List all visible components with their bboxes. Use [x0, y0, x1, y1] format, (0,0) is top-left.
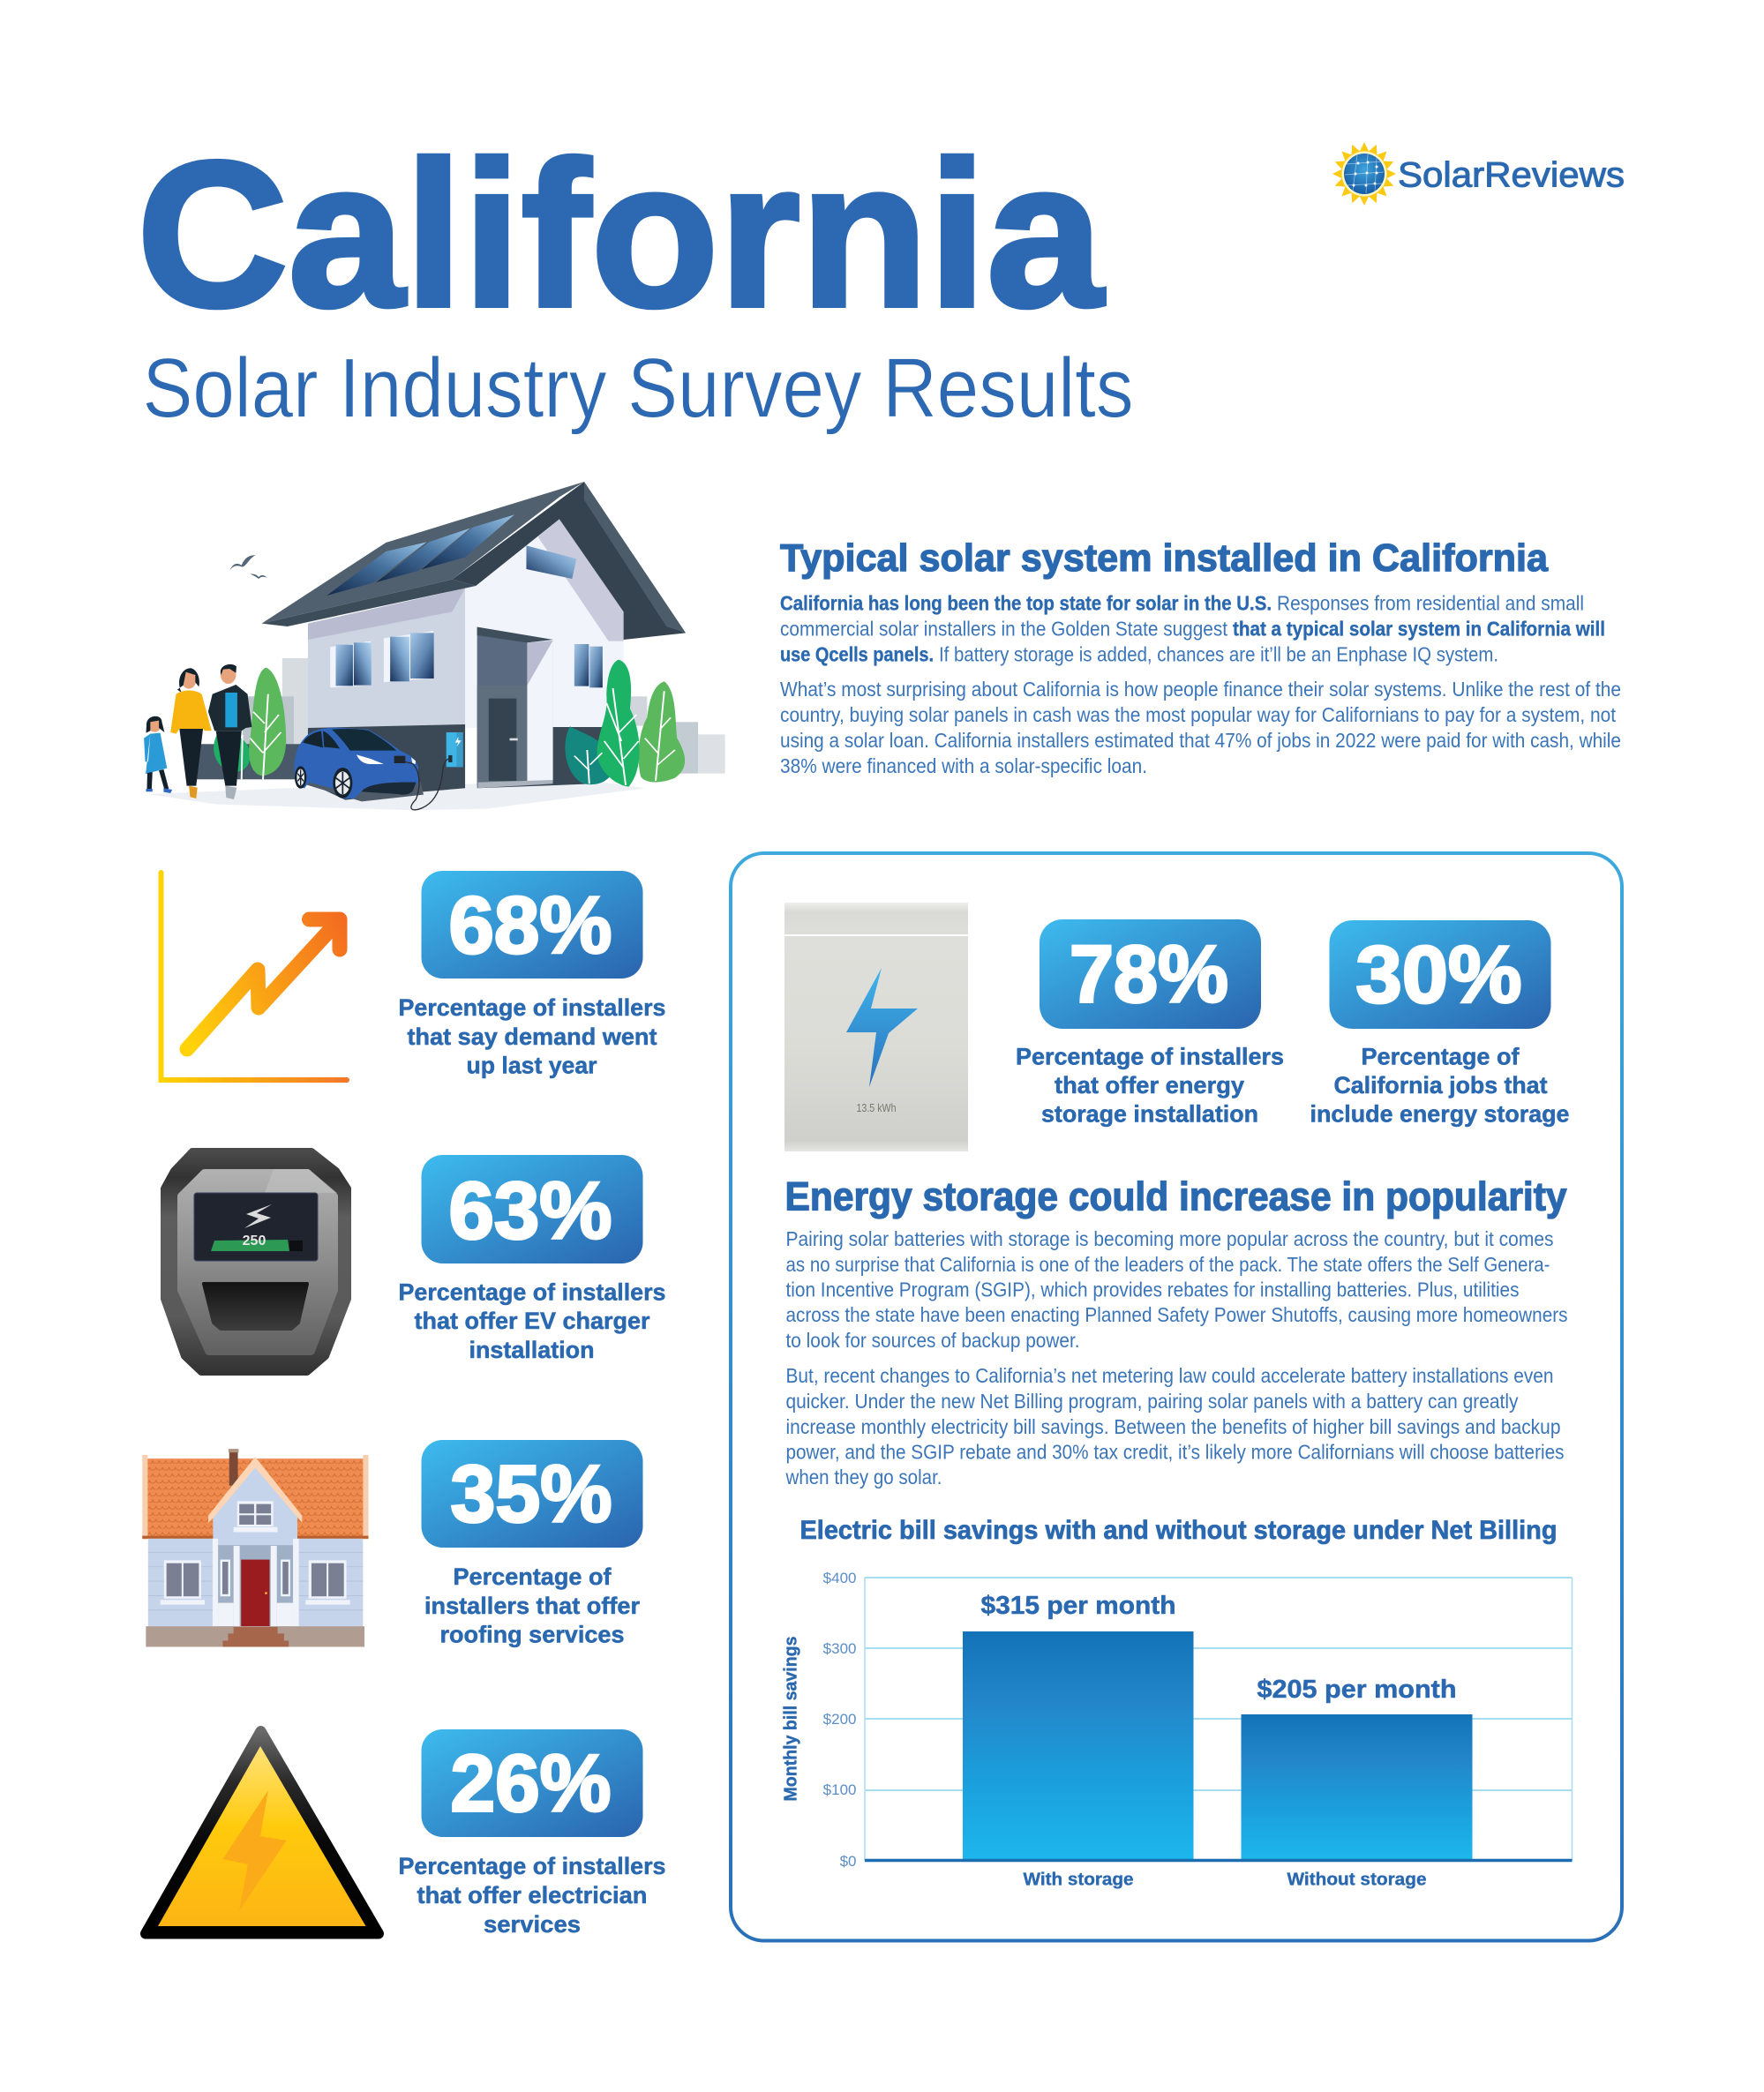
y axis ticks	[823, 1570, 856, 1870]
caption: demand: up last year	[466, 1052, 597, 1078]
caption: demand: Percentage of installers	[399, 994, 665, 1021]
caption: demand	[399, 994, 665, 1078]
pill: 63%	[422, 1155, 642, 1263]
background blocks	[243, 658, 725, 774]
y axis ticks: $0	[840, 1853, 856, 1870]
car charging	[294, 728, 450, 810]
ground shadow	[148, 781, 645, 810]
panel border	[731, 853, 1622, 1941]
illustration: family, house with solar panels and EV	[144, 482, 725, 810]
text block: financing: using a solar loan. California installers estimated that 47% of jobs in 2022 were paid for with cash, while	[780, 729, 1621, 752]
x label: with storage: With storage	[1024, 1871, 1133, 1890]
icon: home battery: 13.5 kWh	[856, 1101, 897, 1114]
text block: storage popularity	[785, 1227, 1567, 1352]
caption: jobs with storage: Percentage of	[1361, 1043, 1520, 1069]
title: California	[137, 118, 1105, 349]
stat: 68% demand	[161, 871, 665, 1080]
text block: California intro: that a typical solar system in California will	[1233, 618, 1605, 641]
text block: financing: 38% were financed with a solar-specific loan.	[780, 754, 1147, 777]
logo: SolarReviews	[1332, 142, 1625, 206]
caption: jobs with storage	[1310, 1043, 1569, 1128]
windows	[330, 545, 603, 687]
text block: financing: What’s most surprising about California is how people finance their solar systems. Unlike the rest of the	[780, 678, 1621, 701]
text block: net billing: power, and the SGIP rebate and 30% tax credit, it’s likely more Californians will choose batteries	[785, 1440, 1564, 1463]
car shadow	[303, 776, 424, 801]
pill: 30%: 30%	[1355, 930, 1521, 1020]
text block: California intro	[780, 591, 1605, 665]
caption: electrician	[399, 1853, 665, 1938]
y axis ticks: $400	[823, 1570, 856, 1586]
caption: energy storage	[1016, 1043, 1284, 1128]
solar panels	[327, 514, 514, 596]
caption: EV charger: Percentage of installers	[399, 1279, 665, 1306]
stat: 26% electrician	[146, 1729, 665, 1938]
caption: energy storage: storage installation	[1041, 1101, 1258, 1128]
pill: 35%	[422, 1440, 642, 1548]
low garden wall	[195, 744, 311, 779]
house and trees	[148, 482, 725, 810]
text block: California intro: Responses from residential and small	[1277, 591, 1584, 614]
caption: energy storage: Percentage of installers	[1016, 1043, 1284, 1069]
porch and door	[477, 627, 553, 788]
text block: California intro: California has long been the top state for solar in the U.S.	[780, 591, 1272, 614]
pill: 78%: 78%	[1070, 930, 1228, 1020]
icon: rising arrow chart	[161, 873, 347, 1080]
woman	[170, 668, 212, 799]
people: family	[144, 664, 251, 799]
x label: without storage: Without storage	[1287, 1871, 1426, 1890]
caption: electrician: Percentage of installers	[399, 1853, 665, 1879]
pill: 68%: 68%	[448, 881, 612, 971]
value label: $205: $205 per month	[1257, 1676, 1456, 1704]
house side wall	[308, 589, 465, 730]
stat: 35% roofing	[142, 1440, 643, 1648]
house base	[308, 724, 465, 800]
windshield	[332, 729, 396, 751]
caption: roofing: installers that offer	[424, 1593, 640, 1619]
pill: 78%	[1040, 919, 1261, 1029]
headlights	[357, 754, 416, 764]
y axis ticks: $300	[823, 1640, 856, 1657]
man	[208, 664, 251, 799]
pill: 63%: 63%	[448, 1166, 612, 1256]
text block: net billing: when they go solar.	[785, 1466, 942, 1488]
text block: storage popularity: tion Incentive Program (SGIP), which provides rebates for installing batteries. Plus, utilities	[785, 1278, 1520, 1301]
house front wall	[465, 519, 624, 728]
icon: home battery	[784, 903, 968, 1151]
heading: typical solar system: Typical solar system installed in California	[780, 536, 1549, 580]
text block: financing: country, buying solar panels in cash was the most popular way for Californians to pay for a system, not	[780, 703, 1617, 726]
charging cable	[402, 759, 450, 810]
caption: EV charger: that offer EV charger	[415, 1308, 650, 1334]
caption: EV charger	[399, 1279, 665, 1363]
value label: $315: $315 per month	[981, 1592, 1175, 1620]
logo wordmark: SolarReviews	[1398, 155, 1625, 194]
y axis ticks: $100	[823, 1781, 856, 1798]
icon: sun with solar globe	[1332, 142, 1396, 206]
pill: 35%: 35%	[450, 1449, 612, 1539]
wheels	[295, 766, 352, 799]
text block: financing	[780, 678, 1621, 777]
caption: electrician: services	[484, 1911, 581, 1938]
people and birds	[144, 555, 267, 799]
pill: 26%	[422, 1729, 642, 1837]
text block: net billing	[785, 1364, 1564, 1488]
icon: warning triangle	[146, 1731, 379, 1934]
icon: EV charger	[164, 1151, 348, 1372]
pill: 68%	[422, 871, 642, 979]
heading: energy storage: Energy storage could increase in popularity	[785, 1173, 1567, 1219]
plug	[394, 756, 405, 763]
EV charger on wall	[447, 732, 463, 767]
text block: storage popularity: Pairing solar batteries with storage is becoming more popular across the country, but it comes	[785, 1227, 1553, 1250]
text block: California intro: If battery storage is added, chances are it’ll be an Enphase IQ system.	[939, 642, 1498, 665]
icon: EV charger: 250	[243, 1233, 266, 1248]
tree left	[214, 668, 286, 779]
bar: without storage	[1241, 1714, 1472, 1860]
icon: house with tile roof	[142, 1449, 369, 1646]
chart title: Electric bill savings with and without storage under Net Billing	[799, 1516, 1557, 1545]
bar chart: monthly bill savings	[782, 1570, 1573, 1890]
bar: with storage	[963, 1631, 1193, 1860]
panel: energy storage	[731, 853, 1622, 1941]
text block: net billing: But, recent changes to California’s net metering law could accelerate battery installations even	[785, 1364, 1553, 1387]
caption: roofing	[424, 1563, 640, 1648]
icon: birds	[229, 555, 267, 579]
stat: 63% EV charger	[164, 1151, 665, 1372]
caption: jobs with storage: California jobs that	[1334, 1072, 1548, 1098]
child	[144, 716, 172, 793]
text block: net billing: quicker. Under the new Net Billing program, pairing solar panels with a battery can greatly	[785, 1390, 1519, 1413]
caption: energy storage: that offer energy	[1055, 1072, 1244, 1098]
caption: jobs with storage: include energy storage	[1310, 1101, 1569, 1128]
text block: storage popularity: across the state have been enacting Planned Safety Power Shutoffs, causing more homeowners	[785, 1303, 1567, 1326]
text block: California intro: use Qcells panels.	[780, 642, 934, 665]
trees right	[565, 660, 685, 787]
text block: storage popularity: as no surprise that California is one of the leaders of the pack. The state offers the Self Genera-	[785, 1253, 1550, 1276]
caption: roofing: roofing services	[439, 1622, 625, 1648]
text block: California intro: commercial solar installers in the Golden State suggest	[780, 618, 1228, 641]
car windows	[303, 731, 340, 748]
subtitle: Solar Industry Survey Results	[143, 341, 1133, 436]
caption: demand: that say demand went	[408, 1024, 657, 1050]
pill: 30%	[1329, 920, 1551, 1029]
caption: roofing: Percentage of	[454, 1563, 612, 1590]
text block: storage popularity: to look for sources of backup power.	[785, 1329, 1080, 1352]
y axis label: Monthly bill savings	[782, 1636, 801, 1802]
pill: 26%: 26%	[450, 1738, 611, 1828]
y axis ticks: $200	[823, 1711, 856, 1728]
caption: electrician: that offer electrician	[417, 1882, 648, 1908]
car body	[294, 728, 418, 799]
caption: EV charger: installation	[469, 1337, 595, 1363]
baseline	[865, 1859, 1573, 1862]
roof	[262, 482, 686, 640]
bumper	[362, 783, 417, 795]
text block: net billing: increase monthly electricity bill savings. Between the benefits of higher bill savings and backup	[785, 1415, 1560, 1438]
